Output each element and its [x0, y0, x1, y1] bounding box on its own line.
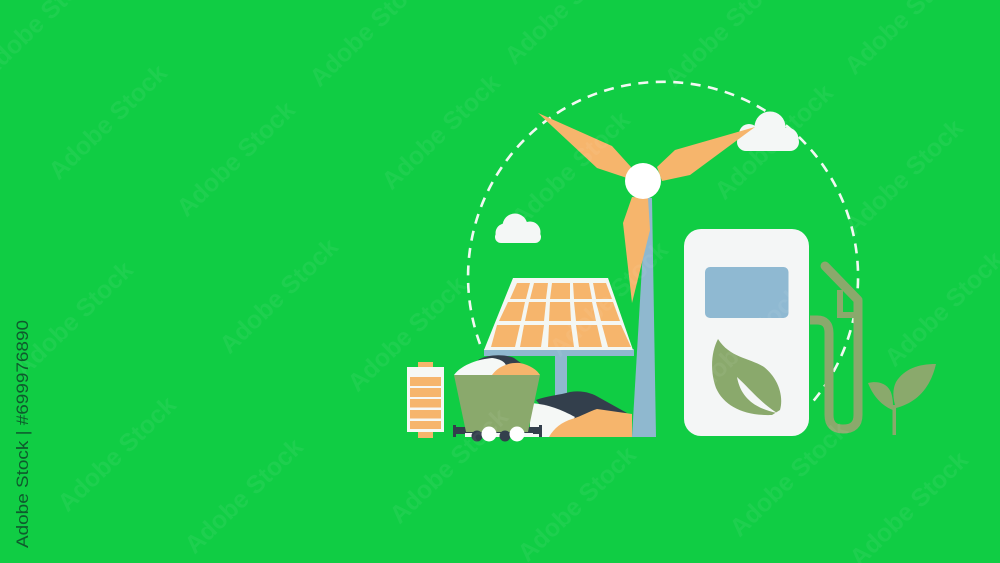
- leaf vein: [737, 377, 777, 413]
- axle ends: [453, 425, 542, 437]
- blade: lower: [623, 197, 650, 303]
- nozzle arm: [825, 266, 858, 300]
- blade: upper left: [538, 113, 631, 178]
- panel frame: [484, 278, 633, 350]
- cloud: large right: [737, 112, 799, 151]
- wind turbine: [538, 113, 755, 437]
- panel post: [555, 350, 567, 396]
- watermark: Adobe Stock: [52, 391, 182, 517]
- cart load: dark: [478, 355, 525, 372]
- blade: right: [657, 127, 755, 181]
- solar panel: [484, 278, 634, 396]
- battery cells: [410, 377, 441, 429]
- watermark: Adobe Stock: [9, 256, 139, 382]
- sprout stem: [892, 405, 896, 435]
- material piles: [530, 391, 632, 437]
- battery body: [407, 367, 444, 432]
- pump body: [684, 229, 809, 436]
- base strip: [465, 433, 533, 437]
- mine cart: [453, 355, 542, 442]
- nozzle handle: [840, 290, 856, 315]
- watermark: Adobe Stock: [724, 416, 854, 542]
- pump screen: [705, 267, 788, 318]
- right leaf: [893, 364, 936, 408]
- white pile: [530, 403, 575, 437]
- watermark: Adobe Stock: [342, 271, 472, 397]
- watermark: Adobe Stock: [544, 236, 674, 362]
- battery caps: [418, 362, 433, 438]
- watermark: Adobe Stock: [679, 281, 809, 407]
- pump leaf: [712, 339, 781, 415]
- watermark: Adobe Stock: [43, 59, 173, 185]
- cart load: white: [454, 358, 507, 375]
- hose: [810, 300, 858, 429]
- dashed orbit arc: [468, 82, 858, 405]
- cloud: small left: [495, 214, 541, 243]
- fuel pump: [684, 229, 809, 436]
- stock credit: Adobe Stock | #699976890: [13, 320, 32, 548]
- cart load: orange: [492, 363, 540, 375]
- orange pile: [549, 409, 632, 437]
- watermark: Adobe Stock: [506, 106, 636, 232]
- watermark: Adobe Stock: [376, 69, 506, 195]
- hub: [625, 163, 661, 199]
- battery: [407, 362, 444, 438]
- dark pile: [536, 391, 627, 420]
- watermark: Adobe Stock: [709, 79, 839, 205]
- axle: [453, 427, 542, 434]
- left leaf: [868, 382, 893, 410]
- panel beam: [484, 349, 634, 356]
- watermark: Adobe Stock: [839, 114, 969, 240]
- watermark: Adobe Stock: [214, 233, 344, 359]
- panel cells: [491, 283, 631, 347]
- dark wheels: [472, 430, 510, 442]
- cart body: [454, 375, 540, 432]
- watermark: Adobe Stock: [171, 96, 301, 222]
- watermark: Adobe Stock: [179, 433, 309, 559]
- tower: [632, 198, 656, 437]
- sprout plant: [868, 364, 936, 435]
- white wheels: [482, 426, 524, 442]
- nozzle and hose: [810, 266, 858, 429]
- watermark: Adobe Stock: [384, 403, 514, 529]
